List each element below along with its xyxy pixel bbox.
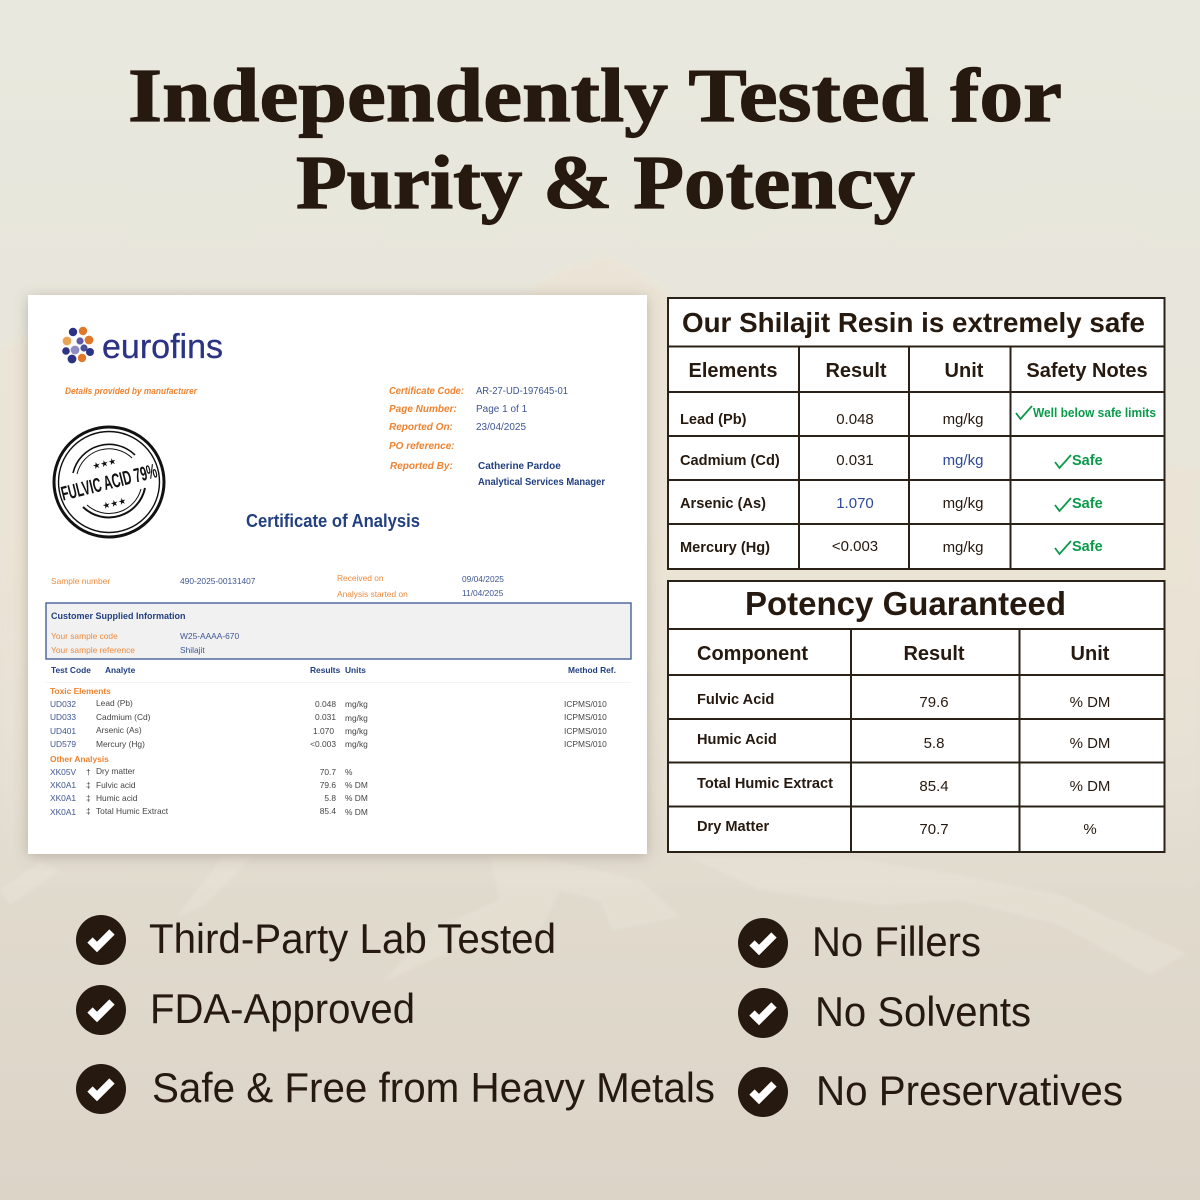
potency table header row	[697, 643, 1110, 665]
panel: potency table	[668, 581, 1165, 852]
results: toxic elements: Toxic Elements	[50, 686, 111, 696]
safety row: mercury: Safe	[1072, 539, 1103, 555]
safety row: cadmium	[680, 452, 1103, 469]
potency row: dry matter: Dry Matter	[697, 819, 769, 835]
safety row: cadmium: mg/kg	[943, 452, 983, 469]
safety row: lead	[680, 406, 1156, 428]
results: toxic elements: Arsenic (As)	[96, 725, 142, 735]
certificate details: Reported On:	[389, 422, 453, 433]
results: toxic elements: UD401	[50, 726, 76, 736]
results: toxic elements: ICPMS/010	[564, 739, 607, 749]
panel: safety table	[668, 298, 1165, 570]
certificate details: AR-27-UD-197645-01	[476, 386, 568, 397]
results: other analysis: 70.7	[320, 767, 336, 777]
certificate details: Page 1 of 1	[476, 404, 528, 415]
claim: no preservatives: No Preservatives	[816, 1067, 1123, 1114]
results: other analysis: XK0A1	[50, 793, 76, 803]
potency row: fulvic acid: 79.6	[919, 694, 949, 711]
results: toxic elements: UD032	[50, 699, 76, 709]
safety table header row: Unit	[945, 360, 984, 382]
stamp: fulvic acid 79%: ★★★	[101, 496, 127, 511]
sample details: 490-2025-00131407	[180, 576, 256, 586]
potency row: total humic extract: 85.4	[919, 778, 949, 795]
certificate details: Analytical Services Manager	[478, 477, 605, 488]
results: other analysis: Total Humic Extract	[96, 806, 169, 816]
certificate details: Catherine Pardoe	[478, 461, 561, 472]
safety table header row: Safety Notes	[1026, 360, 1148, 382]
certificate details: Certificate Code:	[389, 386, 464, 397]
claim: no fillers: No Fillers	[812, 918, 981, 965]
results table header: Results	[310, 665, 341, 675]
certificate details: Page Number:	[389, 404, 457, 415]
results: toxic elements: Cadmium (Cd)	[96, 712, 151, 722]
results: toxic elements: 0.031	[315, 712, 336, 722]
results: other analysis: ‡	[86, 806, 91, 816]
sample details: Received on	[337, 573, 384, 583]
customer supplied information box: Customer Supplied Information	[51, 611, 186, 621]
safety row: mercury: Mercury (Hg)	[680, 540, 770, 556]
safety row: arsenic: Safe	[1072, 496, 1103, 512]
safety row: mercury: <0.003	[832, 538, 878, 555]
safety row: lead: Lead (Pb)	[680, 412, 747, 428]
results table header: Units	[345, 665, 366, 675]
safety row: lead: mg/kg	[943, 411, 983, 428]
claim: no solvents	[738, 988, 1031, 1038]
potency row: dry matter	[697, 819, 1097, 838]
results: other analysis: XK0A1	[50, 780, 76, 790]
results: toxic elements: 1.070	[313, 726, 334, 736]
safety row: mercury	[680, 538, 1103, 556]
title: Independently Tested for	[128, 54, 1062, 138]
results: toxic elements: mg/kg	[345, 739, 368, 749]
results: other analysis: ‡	[86, 793, 91, 803]
title: Purity & Potency	[296, 141, 915, 225]
safety row: arsenic: mg/kg	[943, 495, 983, 512]
potency row: dry matter: %	[1083, 821, 1097, 838]
results: toxic elements	[50, 686, 607, 749]
results: other analysis: % DM	[345, 780, 368, 790]
potency row: humic acid: 5.8	[924, 735, 944, 752]
potency row: fulvic acid: % DM	[1070, 694, 1110, 711]
potency row: dry matter: 70.7	[919, 821, 949, 838]
certificate details: Reported By:	[390, 461, 453, 472]
stamp: fulvic acid 79%: FULVIC ACID 79%	[59, 460, 160, 505]
results: other analysis: % DM	[345, 793, 368, 803]
safety table header row: Elements	[689, 360, 777, 382]
results: other analysis: Fulvic acid	[96, 780, 136, 790]
sample details: Analysis started on	[337, 589, 408, 599]
customer supplied information box	[46, 603, 631, 659]
results: other analysis: †	[86, 767, 91, 777]
claim: safe and free from heavy metals: Safe & Free from Heavy Metals	[152, 1064, 715, 1111]
safety row: arsenic: Arsenic (As)	[680, 496, 766, 512]
customer supplied information box: Your sample code	[51, 631, 118, 641]
potency table header row: Unit	[1071, 643, 1110, 665]
sample details	[51, 573, 504, 599]
results table header: Method Ref.	[568, 665, 616, 675]
safety row: lead: 0.048	[836, 411, 874, 428]
safety row: cadmium: Safe	[1072, 453, 1103, 469]
safety row: lead: Well below safe limits	[1033, 406, 1156, 420]
customer supplied information box: W25-AAAA-670	[180, 631, 239, 641]
results: toxic elements: ICPMS/010	[564, 699, 607, 709]
results table header	[51, 665, 616, 675]
results table header: Analyte	[105, 665, 136, 675]
results: toxic elements: Mercury (Hg)	[96, 739, 145, 749]
certificate details: PO reference:	[389, 441, 455, 452]
potency row: humic acid: % DM	[1070, 735, 1110, 752]
results: toxic elements: Lead (Pb)	[96, 698, 133, 708]
potency row: humic acid	[697, 732, 1110, 752]
results: toxic elements: ICPMS/010	[564, 726, 607, 736]
results: other analysis	[50, 754, 368, 817]
results: other analysis: 5.8	[324, 793, 336, 803]
potency row: humic acid: Humic Acid	[697, 732, 777, 748]
results: other analysis: %	[345, 767, 353, 777]
logo: eurofins: eurofins	[102, 328, 223, 366]
potency table header row: Result	[903, 643, 965, 665]
certificate details	[389, 386, 605, 488]
results: other analysis: ‡	[86, 780, 91, 790]
sample details: Sample number	[51, 576, 110, 586]
panel: certificate of analysis document	[28, 295, 647, 854]
claim: fda-approved: FDA-Approved	[150, 985, 415, 1032]
safety row: arsenic: 1.070	[836, 495, 874, 512]
potency row: fulvic acid: Fulvic Acid	[697, 692, 774, 708]
results: toxic elements: 0.048	[315, 699, 336, 709]
safety row: cadmium: 0.031	[836, 452, 874, 469]
results: other analysis: 85.4	[320, 806, 336, 816]
results: other analysis: % DM	[345, 807, 368, 817]
safety row: arsenic	[680, 495, 1103, 512]
results: toxic elements: <0.003	[310, 739, 336, 749]
results: other analysis: 79.6	[320, 780, 336, 790]
claim: no fillers	[738, 918, 981, 968]
sample details: 11/04/2025	[462, 588, 504, 598]
safety row: cadmium: Cadmium (Cd)	[680, 453, 780, 469]
claim: no solvents: No Solvents	[815, 988, 1031, 1035]
manufacturer note: Details provided by manufacturer	[65, 386, 197, 396]
certificate details: 23/04/2025	[476, 422, 526, 433]
results: toxic elements: mg/kg	[345, 726, 368, 736]
results: toxic elements: mg/kg	[345, 699, 368, 709]
potency table title: Potency Guaranteed	[745, 585, 1066, 622]
results: other analysis: XK05V	[50, 767, 76, 777]
potency row: total humic extract: Total Humic Extract	[697, 776, 833, 792]
potency row: fulvic acid	[697, 692, 1110, 711]
customer supplied information box: Your sample reference	[51, 645, 135, 655]
results: toxic elements: mg/kg	[345, 713, 368, 723]
potency row: total humic extract	[697, 776, 1110, 795]
potency row: total humic extract: % DM	[1070, 778, 1110, 795]
document heading: Certificate of Analysis	[246, 511, 420, 531]
stamp: fulvic acid 79%: ★★★	[91, 456, 117, 471]
safety row: mercury: mg/kg	[943, 539, 983, 556]
customer supplied information box: Shilajit	[180, 645, 205, 655]
results: other analysis: Other Analysis	[50, 754, 109, 764]
title	[128, 54, 1062, 225]
results: toxic elements: ICPMS/010	[564, 712, 607, 722]
stamp: fulvic acid 79%	[54, 427, 164, 537]
results: toxic elements: UD579	[50, 739, 76, 749]
claim: third-party lab tested: Third-Party Lab Tested	[149, 915, 556, 962]
results: other analysis: Dry matter	[96, 766, 135, 776]
results: other analysis: Humic acid	[96, 793, 138, 803]
results table header: Test Code	[51, 665, 91, 675]
results: other analysis: XK0A1	[50, 807, 76, 817]
safety table header row: Result	[825, 360, 887, 382]
sample details: 09/04/2025	[462, 574, 504, 584]
safety table header row	[689, 360, 1148, 382]
safety table title: Our Shilajit Resin is extremely safe	[682, 307, 1145, 338]
results: toxic elements: UD033	[50, 712, 76, 722]
potency table header row: Component	[697, 643, 808, 665]
